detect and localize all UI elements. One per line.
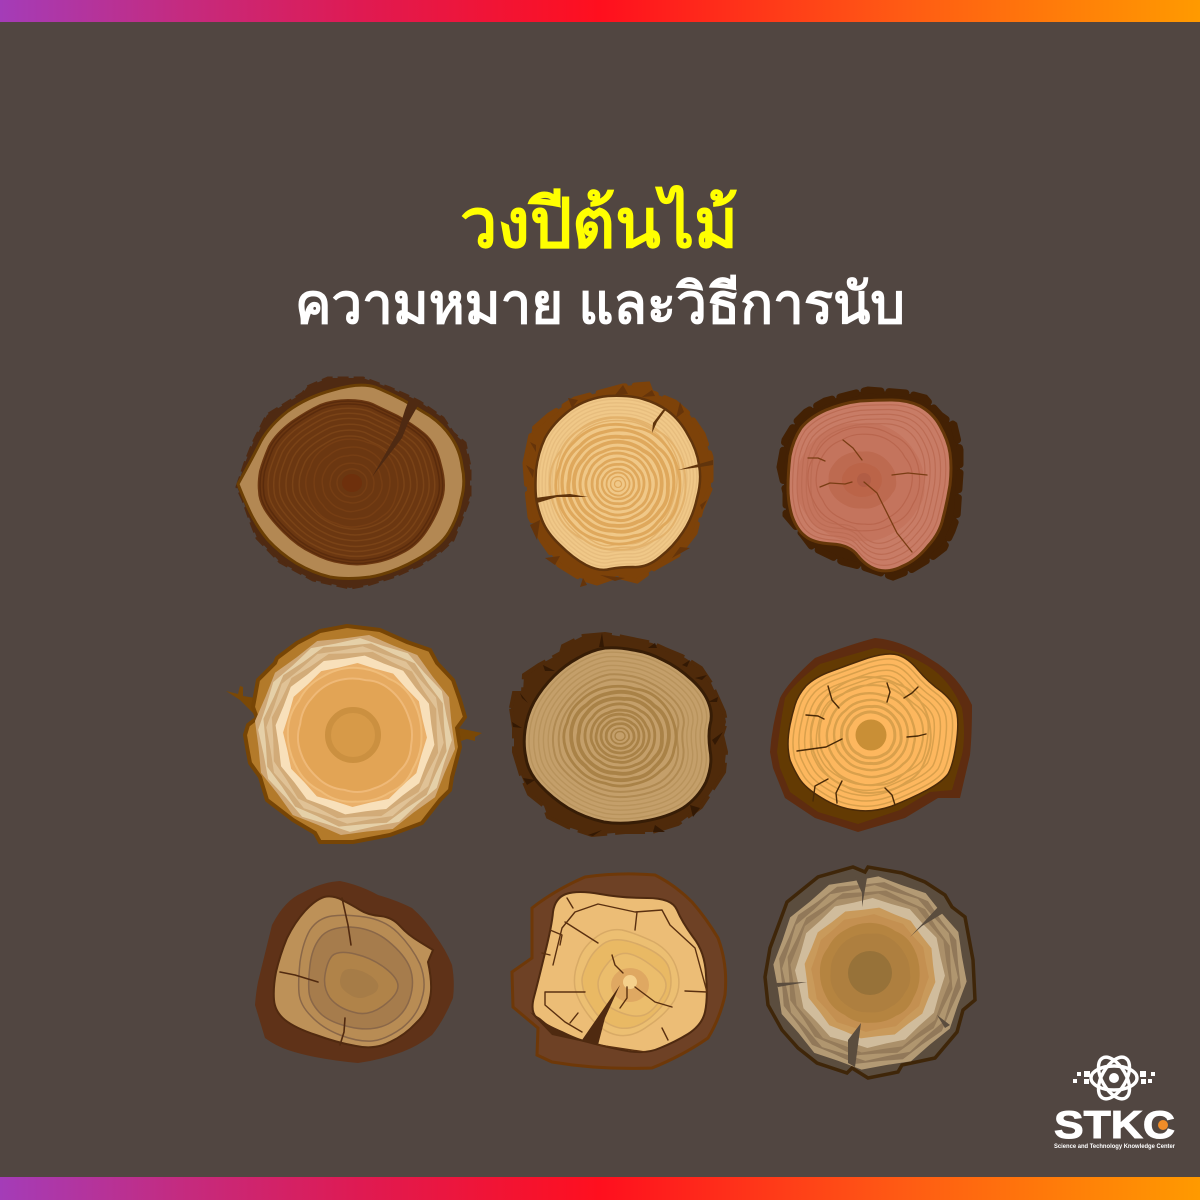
outer band [245, 626, 465, 842]
bark [511, 634, 726, 835]
fine cracks [542, 898, 707, 1052]
outer ring [299, 915, 424, 1041]
tree ring 1: dark brown with wide pale sapwood [237, 378, 470, 588]
core [611, 968, 649, 1002]
heart [828, 451, 896, 509]
outer rings [529, 652, 707, 819]
bark inner [777, 648, 964, 824]
middle ring [582, 940, 671, 1028]
ring bands [241, 621, 469, 849]
cracks [535, 408, 713, 503]
bark wedges [512, 633, 723, 836]
cracks [808, 440, 927, 552]
growth rings [792, 659, 953, 812]
bottom gradient bar [0, 1177, 1200, 1200]
bark wedges [526, 385, 707, 587]
tree ring 6: orange wood with round core [770, 638, 972, 832]
lower swoosh [530, 1012, 598, 1045]
twigs [226, 686, 482, 742]
crack [372, 397, 420, 477]
logo wordmark: STKC [1054, 1104, 1175, 1147]
heartwood [258, 399, 445, 566]
tree ring 7: brown blob with few rings [255, 881, 454, 1063]
inner ring [325, 952, 398, 1014]
subtitle: ความหมาย และวิธีการนับ [295, 272, 905, 335]
inner ring [598, 953, 666, 1016]
logo dots [1073, 1071, 1155, 1084]
wood [533, 892, 707, 1052]
title: วงปีต้นไม้ [460, 184, 738, 262]
wood [524, 648, 711, 823]
tree ring 2: pale wood with orange bark [525, 384, 713, 587]
wood [536, 396, 700, 570]
tree ring 8: cracked pale wood [512, 874, 726, 1068]
bark [237, 378, 470, 588]
bark outer [770, 638, 972, 832]
core [340, 969, 378, 998]
tree ring 3: pink wood with dark bark [780, 390, 960, 577]
bark [780, 390, 960, 577]
core [856, 720, 886, 750]
shaded inner wood [797, 423, 925, 541]
bark [512, 874, 726, 1068]
heart core [835, 457, 889, 503]
cracks [775, 877, 950, 1067]
bark [255, 881, 454, 1063]
bark [765, 867, 975, 1078]
centre ring [328, 710, 378, 760]
core [848, 951, 892, 995]
tree ring 5: tan wood with dark bark [511, 633, 726, 836]
growth rings [788, 405, 946, 565]
large crack [582, 985, 620, 1045]
wood [274, 896, 433, 1047]
inner rings [540, 409, 697, 560]
bark [525, 384, 711, 583]
logo tagline: Science and Technology Knowledge Center [1054, 1144, 1176, 1150]
wood [788, 654, 958, 811]
cracks [797, 683, 926, 805]
outer rings [526, 395, 711, 574]
pith [623, 975, 637, 989]
growth rings [260, 401, 443, 563]
cracks [280, 898, 351, 1045]
logo: STKC [1054, 1052, 1176, 1150]
middle ring [309, 927, 412, 1029]
ring bands [765, 868, 975, 1078]
pith [342, 474, 362, 492]
inner rings [552, 674, 689, 798]
pith [857, 473, 871, 487]
tree ring 9: grey-brown banded rings [765, 867, 975, 1078]
tree ring 4: banded pale rings with twigs [226, 621, 482, 849]
logo atom icon [1091, 1052, 1137, 1104]
top gradient bar [0, 0, 1200, 22]
sapwood [238, 385, 464, 578]
outer ring [574, 930, 679, 1036]
logo orange dot [1158, 1120, 1168, 1130]
wood [788, 400, 951, 571]
